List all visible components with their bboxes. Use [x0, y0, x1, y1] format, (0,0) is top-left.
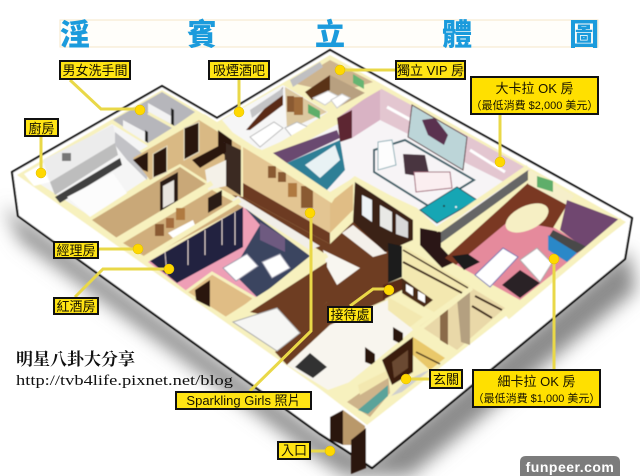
watermark text: 明星八卦大分享 — [16, 349, 135, 369]
painting — [408, 105, 467, 170]
room: reception floor — [287, 243, 472, 390]
title text: 賓 — [187, 18, 217, 52]
title text: 立 — [315, 18, 345, 52]
funpeer badge: funpeer.com — [526, 459, 614, 475]
marble strip and sofa — [250, 262, 327, 345]
room: large karaoke — [273, 88, 530, 230]
label: Sparkling Girls 照片: Sparkling Girls 照片 — [186, 393, 301, 408]
label: 經理房: 經理房 — [56, 243, 96, 258]
wall tops — [17, 55, 626, 425]
room: corridor with doors — [133, 120, 241, 200]
watermark text: http://tvb4life.pixnet.net/blog — [16, 373, 234, 389]
label: 入口: 入口 — [281, 443, 307, 458]
room: small karaoke — [420, 167, 622, 317]
watermark text — [16, 349, 234, 389]
label: 玄關: 玄關 — [433, 372, 459, 387]
title text: 體 — [442, 19, 472, 52]
label: 獨立 VIP 房: 獨立 VIP 房 — [397, 63, 464, 78]
room: smoking bar — [222, 85, 328, 150]
leader lines — [41, 70, 554, 451]
label: 男女洗手間: 男女洗手間 — [62, 63, 128, 78]
room: reception corridor — [232, 182, 413, 365]
label: 細卡拉 OK 房: 細卡拉 OK 房 — [497, 374, 576, 389]
label: 玄關 — [430, 370, 462, 388]
building shadow — [4, 205, 636, 476]
title band — [60, 18, 599, 52]
room: main wall with photos — [203, 87, 421, 244]
label: 大卡拉 OK 房 — [471, 77, 598, 114]
room: kitchen — [24, 124, 148, 217]
label: 大卡拉 OK 房: （最低消費 $2,000 美元） — [471, 98, 598, 112]
room: foyer — [347, 337, 445, 417]
room: wine — [148, 207, 327, 351]
title text — [60, 18, 599, 52]
title text: 淫 — [60, 19, 90, 52]
sofas — [378, 140, 396, 170]
entrance doors — [330, 410, 366, 474]
room: manager — [92, 167, 243, 258]
room: VIP — [290, 60, 373, 108]
label: 廚房 — [25, 119, 58, 136]
leader dots — [36, 65, 559, 456]
label: 細卡拉 OK 房: （最低消費 $1,000 美元） — [473, 391, 600, 405]
label: 紅酒房: 紅酒房 — [56, 299, 96, 314]
label: 吸煙酒吧: 吸煙酒吧 — [213, 63, 265, 78]
label: 大卡拉 OK 房: 大卡拉 OK 房 — [495, 81, 574, 96]
label: 接待處: 接待處 — [330, 308, 370, 322]
label: 廚房: 廚房 — [28, 121, 55, 136]
pool table — [420, 187, 477, 223]
title text: 圖 — [569, 19, 599, 52]
rug outline — [374, 140, 474, 207]
room: toilets — [113, 92, 195, 143]
label: 細卡拉 OK 房 — [473, 370, 600, 407]
small rooms — [402, 246, 505, 350]
